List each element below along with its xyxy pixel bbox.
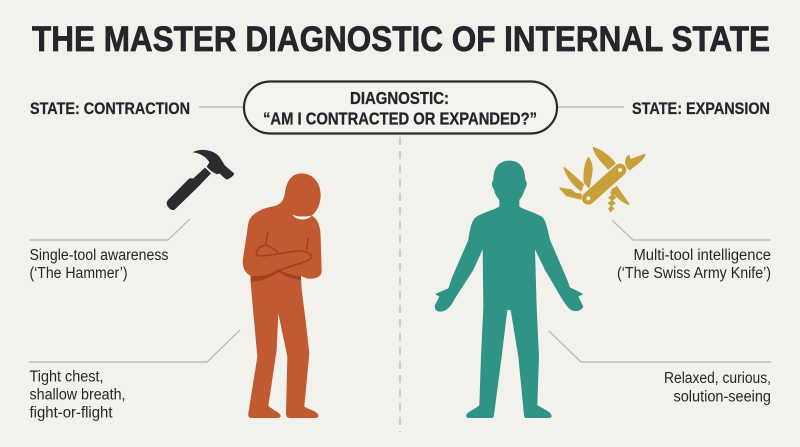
callout: diagnostic question: “AM I CONTRACTED OR EXPANDED?” [263,108,537,128]
label: tight chest [30,368,126,422]
label: multi-tool intelligence [617,247,771,282]
callout: diagnostic question: DIAGNOSTIC: [350,88,449,108]
label: relaxed: solution-seeing [674,388,771,406]
label: tight chest: Tight chest, [30,368,104,386]
heading: state contraction: STATE: CONTRACTION [30,99,190,118]
figure: contracted person [243,173,322,418]
label: relaxed: Relaxed, curious, [664,370,771,387]
label: single-tool awareness: Single-tool awareness [30,247,169,264]
label: single-tool awareness: (‘The Hammer’) [30,265,128,282]
icon: swiss army knife [560,148,645,212]
figure: expanded person [435,161,583,418]
icon: hammer [167,150,234,210]
label: relaxed [664,370,771,406]
callout: diagnostic question [244,82,557,134]
label: multi-tool intelligence: Multi-tool intelligence [634,247,771,264]
label: tight chest: shallow breath, [30,386,126,404]
heading: state expansion: STATE: EXPANSION [632,99,770,118]
label: tight chest: fight-or-flight [30,404,113,422]
label: multi-tool intelligence: (‘The Swiss Army Knife’) [617,265,771,282]
label: single-tool awareness [30,247,169,282]
